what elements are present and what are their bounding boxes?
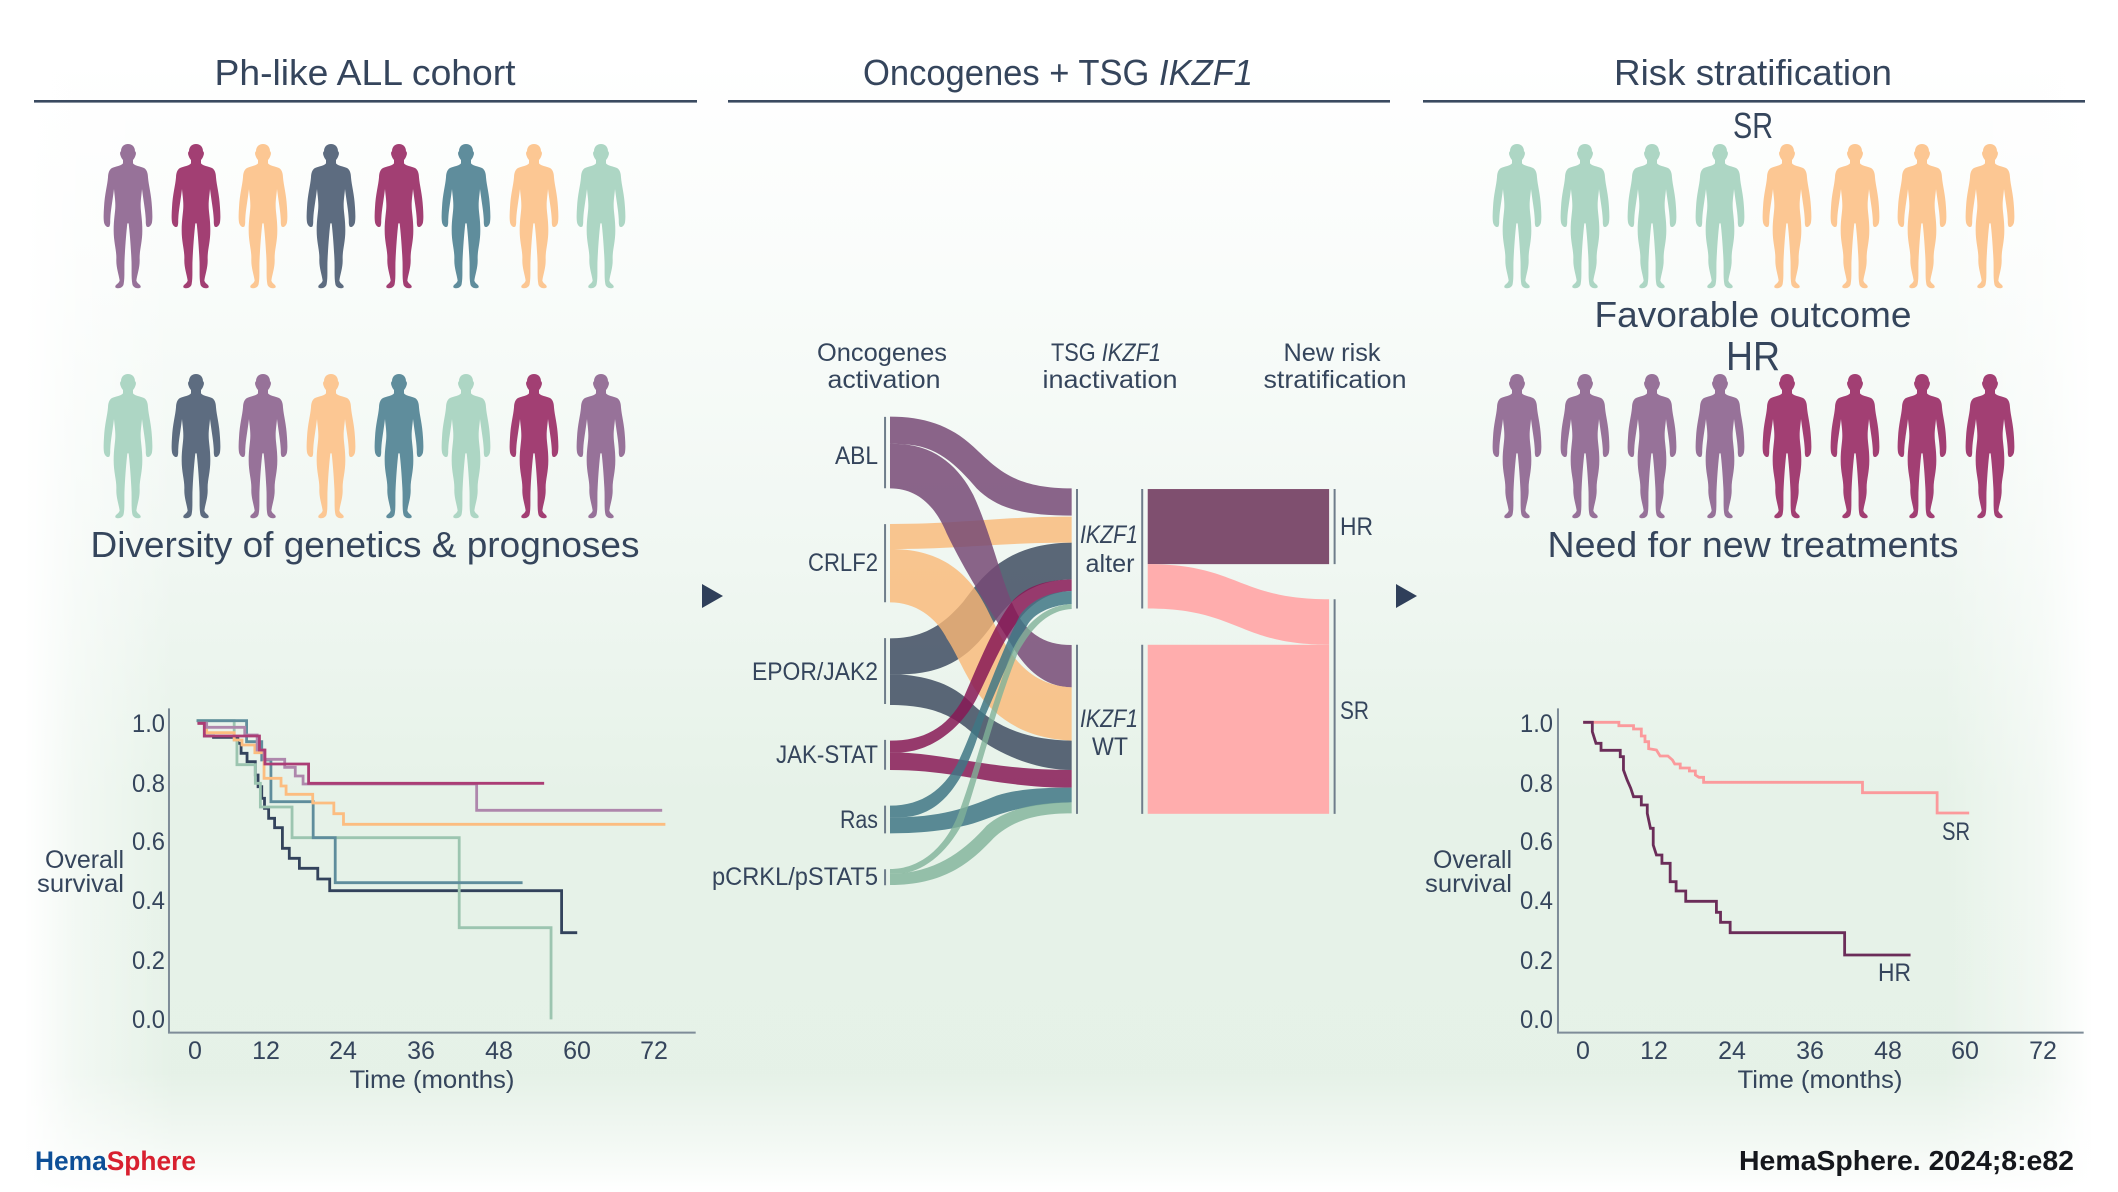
citation: HemaSphere. 2024;8:e82 (1739, 1145, 2074, 1176)
flow: Ras to IKZF1 WT (890, 788, 1072, 833)
heading: SR group: SR (1733, 105, 1773, 146)
chart: sankey of oncogenes, IKZF1 and new risk (712, 339, 1406, 891)
y axis tick labels (132, 710, 165, 1034)
column heading: TSG IKZF1 inactivation (1042, 339, 1178, 394)
axes (169, 708, 696, 1033)
column heading: Oncogenes activation: activation (828, 366, 940, 394)
label: IKZF1 WT: IKZF1 (1080, 705, 1138, 733)
flow: Ras to IKZF1 alter (890, 591, 1072, 817)
panel: diverse cohort figures row 1 (104, 144, 625, 288)
label: IKZF1 alter (1080, 521, 1138, 578)
chart: overall survival by new risk group (1425, 708, 2084, 1094)
y axis title: Overall (1433, 846, 1512, 874)
labels: oncogene nodes: pCRKL/pSTAT5 (712, 863, 878, 891)
x axis tick labels: 60 (1951, 1037, 1979, 1065)
risk blocks and node bars (885, 417, 1335, 885)
logo: HemaSphere: HemaSphere (35, 1146, 196, 1176)
x axis tick labels: 0 (1576, 1037, 1590, 1065)
flow: CRLF2 to IKZF1 alter (890, 517, 1072, 549)
y axis tick labels: 0.0 (132, 1006, 165, 1034)
y axis title: survival (37, 870, 124, 898)
arrow: cohort to oncogenes (702, 584, 723, 608)
flow: ABL to IKZF1 alter (890, 417, 1072, 516)
sankey flows (890, 417, 1072, 885)
y axis tick labels: 1.0 (1520, 710, 1553, 738)
y axis tick labels: 1.0 (132, 710, 165, 738)
flow: ABL to IKZF1 WT (890, 443, 1072, 687)
y axis tick labels: 0.4 (132, 887, 165, 915)
heading: Risk stratification: Risk stratification (1614, 52, 1892, 93)
column heading: TSG IKZF1 inactivation: inactivation (1042, 366, 1178, 394)
y axis tick labels: 0.0 (1520, 1006, 1553, 1034)
x axis tick labels (1576, 1037, 2057, 1065)
x axis tick labels: 12 (252, 1037, 280, 1065)
x axis tick labels: 24 (329, 1037, 357, 1065)
flow: pCRKL/pSTAT5 to IKZF1 alter (890, 604, 1072, 873)
curve: HR (1583, 722, 1911, 955)
label: SR node: SR (1340, 697, 1369, 725)
y axis title: Overall (45, 846, 124, 874)
label: IKZF1 alter: IKZF1 (1080, 521, 1138, 549)
column heading: New risk stratification (1264, 339, 1406, 394)
curve: teal Ras (197, 721, 523, 883)
panel: HR figures (1493, 374, 2014, 518)
x axis title: Time (months) (350, 1066, 514, 1094)
flow: EPOR/JAK2 to IKZF1 alter (890, 543, 1072, 674)
y axis title (37, 846, 124, 898)
column heading: Oncogenes activation (817, 339, 947, 394)
y axis tick labels: 0.2 (1520, 947, 1553, 975)
curve: magenta JAK-STAT (197, 723, 544, 783)
x axis tick labels: 12 (1640, 1037, 1668, 1065)
y axis tick labels: 0.6 (1520, 828, 1553, 856)
x axis tick labels (188, 1037, 668, 1065)
arrow: oncogenes to risk (1396, 584, 1417, 608)
x axis tick labels: 0 (188, 1037, 202, 1065)
column heading: New risk stratification: stratification (1264, 366, 1406, 394)
labels: oncogene nodes: EPOR/JAK2 (752, 658, 878, 686)
curve label: HR: HR (1878, 959, 1911, 987)
risk block: SR (1148, 645, 1329, 814)
curve label: SR: SR (1942, 818, 1970, 846)
curve: purple ABL (197, 723, 662, 810)
text: favorable outcome: Favorable outcome (1594, 294, 1912, 335)
x axis tick labels: 24 (1718, 1037, 1746, 1065)
text: need for new treatments: Need for new treatments (1548, 524, 1958, 565)
y axis tick labels: 0.8 (1520, 770, 1553, 798)
label: IKZF1 WT: WT (1092, 733, 1128, 761)
x axis title: Time (months) (1738, 1066, 1902, 1094)
y axis tick labels: 0.8 (132, 770, 165, 798)
x axis tick labels: 60 (563, 1037, 591, 1065)
column heading: TSG IKZF1 inactivation: TSG IKZF1 (1051, 339, 1161, 367)
labels: oncogene nodes: JAK-STAT (776, 741, 878, 769)
flow: CRLF2 to IKZF1 WT (890, 549, 1072, 741)
x axis tick labels: 72 (640, 1037, 668, 1065)
curve: SR (1583, 722, 1969, 813)
node bars (885, 417, 1335, 885)
risk block: HR (1148, 489, 1329, 564)
curve: navy EPOR/JAK2 (197, 722, 577, 933)
heading: Ph-like ALL cohort: Ph-like ALL cohort (214, 52, 516, 93)
heading: Oncogenes + TSG IKZF1: Oncogenes + TSG IKZF1 (863, 52, 1253, 93)
x axis tick labels: 36 (407, 1037, 435, 1065)
x axis tick labels: 36 (1796, 1037, 1824, 1065)
axes and curves (1558, 708, 2084, 1033)
heading: HR group: HR (1726, 333, 1780, 379)
flow: pCRKL/pSTAT5 to IKZF1 WT (890, 802, 1072, 885)
column heading: New risk stratification: New risk (1284, 339, 1381, 367)
curve: light green pCRKL/pSTAT5 (197, 721, 551, 1019)
flow: JAK-STAT to IKZF1 WT (890, 752, 1072, 788)
y axis title: survival (1425, 870, 1512, 898)
labels: oncogene nodes: Ras (840, 806, 878, 834)
x axis tick labels: 48 (1874, 1037, 1902, 1065)
text: diversity caption: Diversity of genetics & prognoses (90, 524, 640, 565)
x axis tick labels: 48 (485, 1037, 513, 1065)
labels: oncogene nodes: ABL (835, 442, 878, 470)
x axis tick labels: 72 (2029, 1037, 2057, 1065)
label: IKZF1 WT (1080, 705, 1138, 761)
y axis tick labels (1520, 710, 1553, 1034)
flow: EPOR/JAK2 to IKZF1 WT (890, 674, 1072, 770)
y axis tick labels: 0.4 (1520, 887, 1553, 915)
y axis tick labels: 0.6 (132, 828, 165, 856)
label: HR node: HR (1340, 513, 1373, 541)
curve: orange CRLF2 (197, 723, 665, 824)
panel: SR figures (1493, 144, 2014, 288)
risk flow: IKZF1 altered to SR (1148, 564, 1329, 645)
chart: overall survival by oncogene group (37, 708, 696, 1094)
y axis title (1425, 846, 1512, 898)
label: IKZF1 alter: alter (1086, 550, 1134, 578)
column heading: Oncogenes activation: Oncogenes (817, 339, 947, 367)
panel: diverse cohort figures row 2 (104, 374, 625, 518)
labels: oncogene nodes (712, 442, 878, 891)
labels: oncogene nodes: CRLF2 (808, 549, 878, 577)
flow: JAK-STAT to IKZF1 alter (890, 579, 1072, 752)
y axis tick labels: 0.2 (132, 947, 165, 975)
